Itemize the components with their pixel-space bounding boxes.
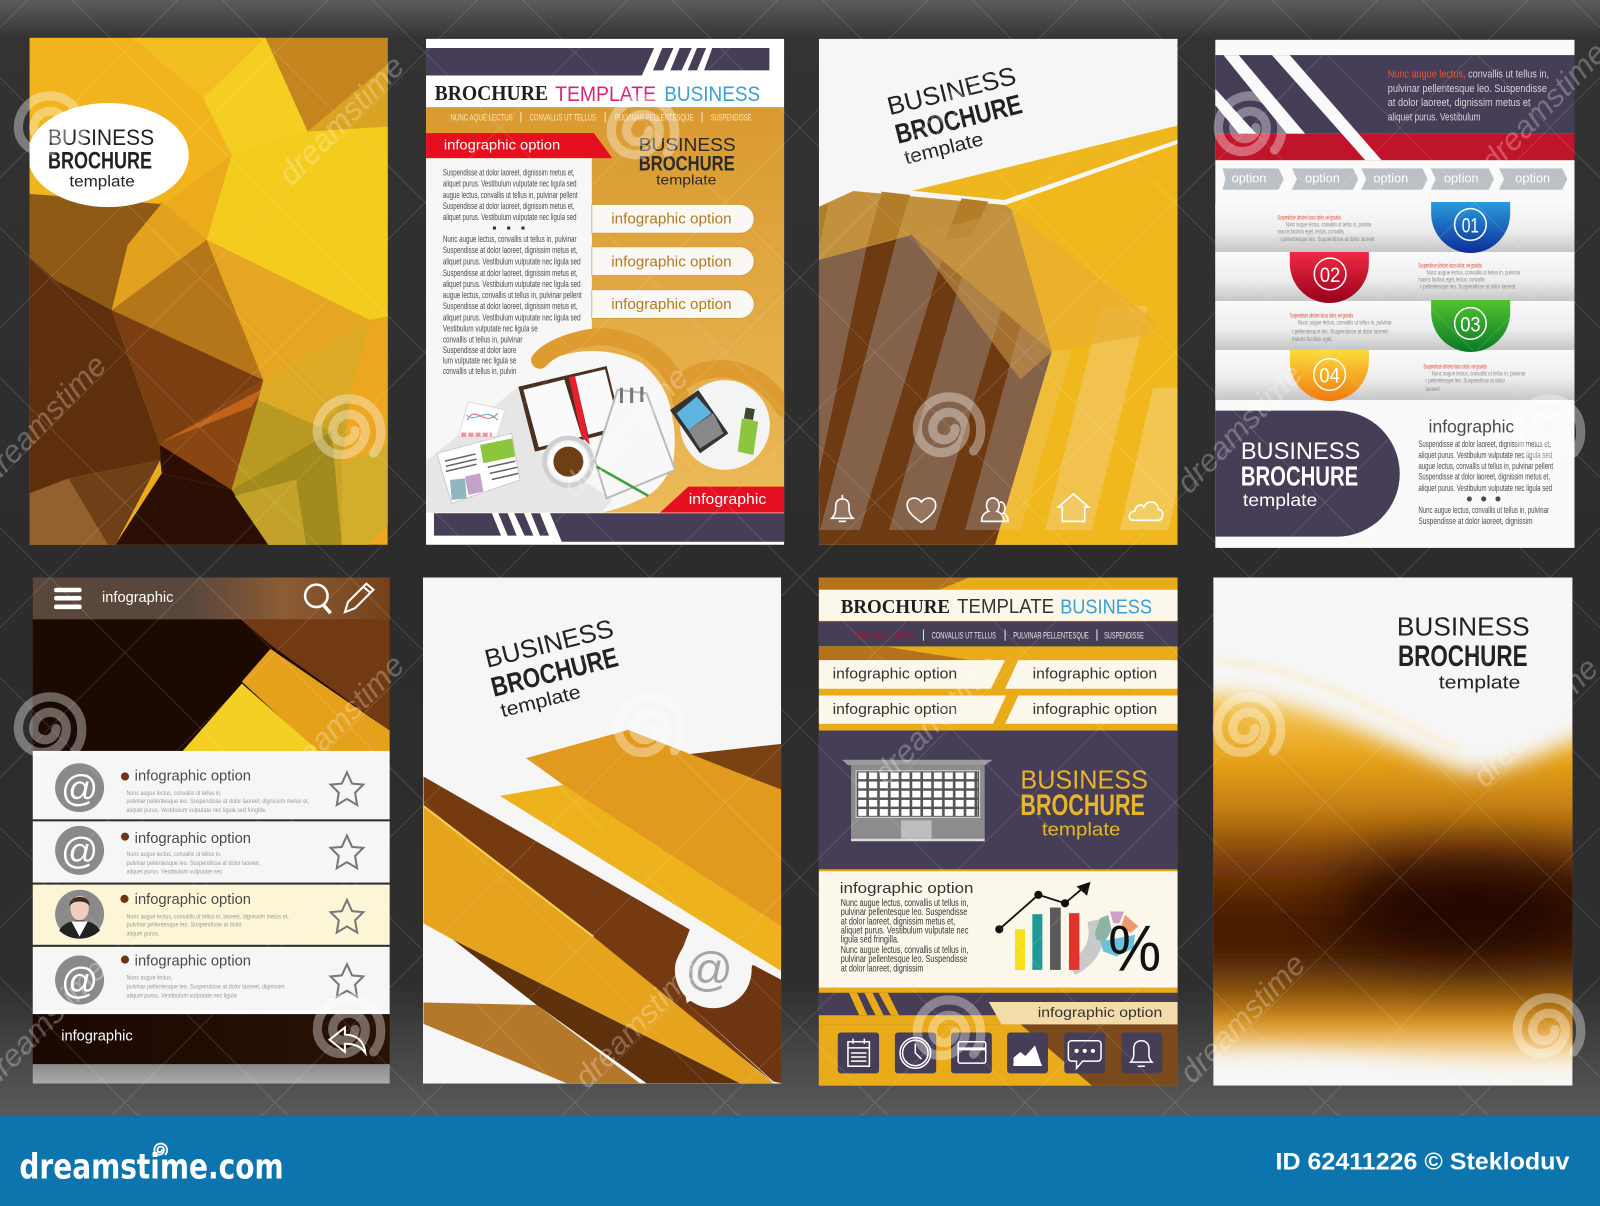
header bar — [33, 577, 390, 619]
infographic text block — [1418, 417, 1553, 526]
text block — [840, 881, 973, 974]
option rows: infographic option — [1033, 667, 1157, 683]
cream section — [819, 871, 1178, 988]
title — [434, 86, 760, 101]
icon: heart — [907, 498, 936, 522]
step captions: Suspendisse ultricies lacus dolor, vel gravida — [1418, 262, 1482, 269]
row 1: @ — [61, 768, 98, 809]
intro text: Nunc augue lectus, convallis ut tellus in, — [1388, 69, 1549, 81]
heading: BUSINESS — [1397, 614, 1530, 642]
heading: business brochure template — [48, 125, 154, 191]
white teardrop with at sign — [675, 929, 753, 1008]
menu bar — [819, 621, 1178, 646]
red bar — [1215, 134, 1574, 160]
infographic text block: infographic — [1429, 417, 1515, 437]
heading: BROCHURE — [1398, 640, 1528, 673]
heading — [639, 134, 736, 188]
panel: diagonal geometric cover — [818, 39, 1199, 546]
chart: donut and percent: % — [1108, 911, 1161, 984]
body text: Vestibulum vulputate nec ligula se — [443, 324, 538, 334]
option chevrons: option — [1515, 171, 1550, 186]
bottom icons — [832, 494, 1163, 522]
title on blob: template — [1243, 490, 1317, 510]
body text: Suspendisse at dolor laore — [443, 345, 516, 355]
title: BROCHURE — [1020, 789, 1145, 822]
white diagonals — [1215, 55, 1382, 160]
bottom bar — [33, 1014, 390, 1064]
heading — [1397, 614, 1530, 693]
panel: inside brochure with options — [426, 39, 784, 545]
step captions: Nunc augue lectus, convallis ut tellus in, pulvina — [1286, 222, 1372, 229]
title: BUSINESS — [1020, 765, 1148, 795]
icon: laptop — [842, 760, 993, 841]
row 2: pulvinar pellentesque leo. Suspendisse at dolor laoreet, — [127, 860, 260, 867]
watermark: spirals — [18, 96, 1581, 1056]
option chevrons: option — [1373, 171, 1408, 186]
row 4: infographic option — [135, 954, 251, 970]
heading rotated: BUSINESS — [884, 62, 1019, 121]
text block: aliquet purus. Vestibulum vulputate nec — [841, 926, 968, 937]
white title ellipse — [28, 103, 189, 207]
gray bands — [1215, 203, 1574, 400]
step captions: laoreet — [1426, 386, 1440, 393]
title: BUSINESS — [1060, 597, 1152, 619]
brown stripes shape — [819, 235, 1052, 545]
step captions — [1278, 214, 1526, 393]
brown band — [423, 776, 773, 1083]
step captions: Suspendisse ultricies lacus dolor, vel gravida — [1290, 312, 1353, 319]
menu bar: NUNC AQUE LECTUS — [855, 631, 916, 641]
heading rotated: template — [498, 681, 583, 722]
title on blob: BROCHURE — [1241, 461, 1358, 492]
icon: pencil — [345, 584, 373, 612]
body text: aliquet purus. Vestibulum vulputate nec ligula sed — [443, 179, 577, 189]
row 3 with avatar: infographic option — [135, 892, 251, 908]
body text: aliquet purus. Vestibulum vulputate nec ligula sed — [443, 279, 581, 289]
image id and credit: ID 62411226 © Stekloduv — [1276, 1148, 1570, 1175]
option chevrons: option — [1232, 171, 1266, 186]
text block: pulvinar pellentesque leo. Suspendisse — [841, 907, 967, 918]
title: TEMPLATE — [555, 82, 656, 106]
title: BROCHURE — [841, 596, 950, 618]
icon: area chart — [1013, 1047, 1042, 1065]
gold diagonal — [242, 649, 390, 751]
row 3 with avatar: aliquet purus. — [127, 931, 159, 938]
row 1: aliquet purus. Vestibulum vulputate nec ligula sed fringilla. — [127, 807, 266, 814]
icon: credit card — [958, 1042, 986, 1063]
icon: search — [305, 585, 331, 613]
option pills: infographic option — [611, 211, 732, 227]
logo text: dreamstime.com — [19, 1147, 284, 1187]
red ribbon — [426, 133, 612, 158]
title on blob: BUSINESS — [1241, 438, 1360, 465]
white content area — [426, 158, 675, 513]
heading: business brochure template: BROCHURE — [48, 147, 152, 174]
option chevrons — [1222, 168, 1567, 190]
brown diagonal — [242, 578, 390, 730]
step captions: r pellentesque leo. Suspendisse at dolor laoreet — [1292, 329, 1388, 336]
menu bar: CONVALLIS UT TELLUS — [932, 631, 996, 641]
orange background — [426, 107, 784, 513]
text block: Nunc augue lectus, convallis ut tellus in, — [841, 898, 968, 909]
row 1: pulvinar pellentesque leo. Suspendisse at dolor laoreet, dignissim metus et, — [127, 798, 309, 805]
icon tiles — [838, 1033, 1162, 1073]
watermark: dreamstime text: dreamstime — [1169, 356, 1309, 500]
row 2: Nunc augue lectus, convallis ut tellus in, — [127, 851, 222, 858]
option pills — [592, 205, 754, 318]
row 2: infographic option — [135, 831, 251, 847]
step 01 — [1431, 202, 1510, 253]
icon: menu — [54, 588, 82, 609]
option rows: infographic option — [833, 702, 957, 718]
yellow mass — [995, 144, 1178, 545]
title — [841, 596, 1152, 619]
body text: aliquet purus. Vestibulum vulputate nec ligula sed — [443, 312, 581, 322]
option chevrons: option — [1444, 171, 1479, 186]
heading: business brochure template: BUSINESS — [48, 125, 154, 150]
watermark: dreamstime text: dreamstime — [554, 359, 695, 503]
top purple block — [1215, 55, 1574, 134]
watermark: dreamstime text: dreamstime — [866, 48, 1006, 192]
footer area — [819, 988, 1178, 993]
dark core glow — [1337, 854, 1600, 952]
row 2: aliquet purus. Vestibulum vulputate nec — [127, 868, 223, 875]
yellow band — [912, 125, 1178, 200]
icon: bell — [832, 495, 853, 521]
wave gradient — [1173, 694, 1600, 1063]
chart: bars — [1015, 908, 1079, 970]
body text: Suspendisse at dolor laoreet, dignissim metus et, — [443, 245, 578, 255]
body text: Suspendisse at dolor laoreet, dignissim metus et, — [443, 167, 574, 177]
watermark: dreamstime text: dreamstime — [271, 48, 411, 192]
text block: infographic option — [840, 881, 973, 897]
text block: at dolor laoreet, dignissim metus et, — [841, 916, 955, 927]
intro text: pulvinar pellentesque leo. Suspendisse — [1388, 83, 1547, 95]
panel: brochure with laptop and chart — [819, 577, 1178, 1086]
body text: convallis ut tellus in, pulvinar — [443, 334, 522, 344]
menu bar: PULVINAR PELLENTESQUE — [1013, 631, 1089, 641]
watermark: dreamstime text: dreamstime — [866, 647, 1006, 791]
red infographic tag — [660, 487, 784, 513]
gold band — [423, 806, 773, 1083]
step captions: mauris facilisis eget, lectus, convallis — [1278, 229, 1344, 236]
step 04: 04 — [1319, 364, 1340, 388]
step captions: r pellentesque leo. Suspendisse at dolor — [1426, 378, 1506, 385]
heading rotated — [482, 615, 621, 722]
body text: aliquet purus. Vestibulum vulputate nec ligula sed — [443, 212, 577, 222]
option chevrons: option — [1305, 171, 1340, 186]
footer label: infographic — [61, 1029, 133, 1045]
pale wave line — [1213, 661, 1459, 750]
body text: convallis ut tellus in, pulvin — [443, 366, 516, 376]
cream label: infographic option — [1038, 1005, 1162, 1020]
icon: calendar — [848, 1039, 869, 1066]
title on blob — [1241, 438, 1360, 510]
row 4: @ — [61, 960, 98, 1001]
option pills: infographic option — [611, 254, 732, 270]
title: TEMPLATE — [957, 596, 1054, 618]
watermark: dreamstime text: dreamstime — [567, 951, 707, 1095]
text block: at dolor laoreet, dignissim — [841, 963, 923, 974]
step 02 — [1290, 252, 1369, 303]
tan band — [423, 1003, 640, 1083]
heading rotated: BROCHURE — [488, 641, 621, 703]
translucent overlay — [912, 210, 1052, 380]
menu bar: SUSPENDISSE — [1104, 631, 1144, 641]
step captions: mauris facilisis eget, lectus, convallis — [1418, 277, 1485, 284]
icon: people — [982, 498, 1008, 521]
body text: augue lectus, convallis ut tellus in, pulvinar pellent — [443, 290, 582, 300]
chart: donut and percent — [1071, 911, 1161, 984]
yellow stripe — [500, 785, 782, 971]
heading rotated — [888, 68, 1023, 164]
step 02: 02 — [1320, 263, 1340, 287]
subtitle menu: SUSPENDISSE — [711, 112, 752, 122]
option rows — [819, 660, 1178, 724]
purple title blob — [1215, 411, 1400, 537]
option rows: infographic option — [1033, 702, 1157, 718]
gray footer strip — [33, 1064, 390, 1084]
row 1: infographic option — [135, 769, 251, 785]
text block: pulvinar pellentesque leo. Suspendisse — [841, 954, 967, 965]
heading: business brochure template: template — [69, 174, 135, 191]
icon: speech bubble — [1068, 1041, 1101, 1068]
footer stripes — [434, 513, 784, 542]
swirl — [540, 337, 784, 408]
purple section — [819, 731, 1178, 869]
step captions: Nunc augue lectus, convallis ut tellus in, pulvinar — [1432, 370, 1526, 377]
footer bar — [0, 1116, 1600, 1206]
row 4: pulvinar pellentesque leo. Suspendisse at dolor laoreet, dignissim — [127, 984, 285, 991]
subtitle menu: NUNC AQUE LECTUS — [451, 112, 513, 122]
row 3 with avatar: Nunc augue lectus, convallis ut tellus in, laoreet, dignissim metus et, — [127, 913, 289, 920]
dark brown band — [453, 940, 740, 1083]
footer yellow stripes — [819, 993, 1020, 1024]
step captions: Suspendisse ultricies lacus dolor, vel gravida — [1423, 363, 1487, 370]
infographic text block: Suspendisse at dolor laoreet, dignissim — [1418, 516, 1533, 526]
illustration: desk items — [426, 366, 758, 512]
body text: Suspendisse at dolor laoreet, dignissim metus et, — [443, 268, 578, 278]
right brown — [687, 965, 782, 1083]
tan darker strips — [819, 192, 988, 247]
option rows: infographic option — [833, 667, 957, 683]
body text: augue lectus, convallis ut tellus in, pulvinar pellent — [443, 190, 578, 200]
white teardrop with at sign: @ — [685, 944, 733, 996]
body text: Suspendisse at dolor laoreet, dignissim metus et, — [443, 301, 578, 311]
upper gold — [526, 730, 782, 933]
watermark: dreamstime text: dreamstime — [271, 647, 411, 791]
body text: aliquet purus. Vestibulum vulputate nec ligula sed — [443, 256, 581, 266]
row 4: aliquet purus. Vestibulum vulputate nec ligula — [127, 992, 237, 999]
step captions: Nunc augue lectus, convallis ut tellus in, pulvinar — [1298, 319, 1392, 326]
row 1: Nunc augue lectus, convallis ut tellus in, — [127, 790, 222, 797]
row 2 — [55, 826, 363, 875]
step captions: Nunc augue lectus, convallis ut tellus in, pulvinar — [1427, 269, 1521, 276]
step captions: Suspendisse ultricies lacus dolor, vel gravida — [1278, 214, 1341, 221]
step 04 — [1290, 350, 1369, 401]
title: BUSINESS — [664, 82, 760, 106]
row 1 — [55, 763, 363, 814]
intro text — [1388, 69, 1549, 123]
icon: cloud — [1129, 502, 1163, 520]
chart: trend arrow — [996, 883, 1090, 933]
option pills: infographic option — [611, 297, 732, 313]
panel: numbered steps brochure — [1215, 40, 1574, 548]
icon: house — [1058, 494, 1089, 521]
panel: gradient wave cover — [1173, 577, 1600, 1086]
step captions: r pellentesque leo. Suspendisse at dolor laoreet — [1280, 236, 1375, 243]
title: BROCHURE — [435, 81, 548, 105]
watermark: dreamstime text: dreamstime — [1172, 946, 1312, 1090]
heading: BUSINESS — [639, 134, 736, 155]
body text: lum vulputate nec ligula se — [443, 356, 516, 366]
text block: ligula sed fringilla. — [841, 935, 899, 946]
yellow triangle — [183, 684, 318, 751]
panel: polygon cover brochure — [28, 38, 389, 545]
title: template — [1042, 819, 1120, 840]
intro text: at dolor laoreet, dignissim metus et — [1388, 97, 1531, 109]
white title band — [819, 590, 1178, 621]
step captions: r pellentesque leo. Suspendisse at dolor laoreet — [1420, 284, 1515, 291]
subtitle menu — [451, 112, 752, 122]
body text: Nunc augue lectus, convallis ut tellus in, pulvinar — [443, 234, 577, 244]
panel: app screen list — [33, 577, 390, 1084]
icon: reply arrow — [330, 1027, 365, 1053]
row 4: Nunc augue lectus, — [127, 974, 173, 981]
tan shape — [819, 191, 1052, 545]
subtitle menu: PULVINAR PELLENTESQUE — [615, 112, 693, 122]
text block: Nunc augue lectus, convallis ut tellus in, — [841, 945, 968, 956]
heading rotated: template — [902, 128, 986, 169]
logo spiral — [154, 1144, 167, 1155]
intro text: aliquet purus. Vestibulum — [1388, 111, 1481, 123]
step 03: 03 — [1460, 313, 1481, 337]
upper brown — [690, 744, 782, 791]
body text: Suspendisse at dolor laoreet, dignissim metus et, — [443, 201, 574, 211]
step 03 — [1431, 300, 1510, 352]
title — [1020, 765, 1148, 840]
body text — [443, 167, 582, 376]
red infographic tag: infographic — [689, 492, 766, 508]
row 3 with avatar: pulvinar pellentesque leo. Suspendisse at dolor — [127, 921, 242, 928]
icon: bell — [1131, 1041, 1152, 1066]
heading rotated: BROCHURE — [892, 88, 1025, 150]
step 01: 01 — [1462, 214, 1479, 238]
header label: infographic — [102, 590, 173, 606]
heading: template — [1439, 672, 1520, 693]
row 4 — [55, 954, 363, 1004]
list rows — [33, 751, 390, 819]
step captions: mauris facilisis eget. — [1292, 336, 1333, 343]
red ribbon: infographic option — [444, 137, 560, 153]
row 2: @ — [61, 831, 98, 872]
tile icons — [848, 1038, 1152, 1068]
heading: template — [656, 173, 717, 188]
panel: diagonal stripes cover — [423, 577, 782, 1084]
heading: BROCHURE — [639, 151, 735, 175]
row 3 with avatar — [55, 890, 363, 939]
gold highlight — [423, 806, 593, 937]
cream label — [989, 1002, 1178, 1024]
subtitle menu: CONVALLIS UT TELLUS — [530, 112, 596, 122]
header stripes — [426, 48, 769, 76]
heading rotated: BUSINESS — [482, 615, 616, 674]
icon: clock — [900, 1038, 931, 1068]
